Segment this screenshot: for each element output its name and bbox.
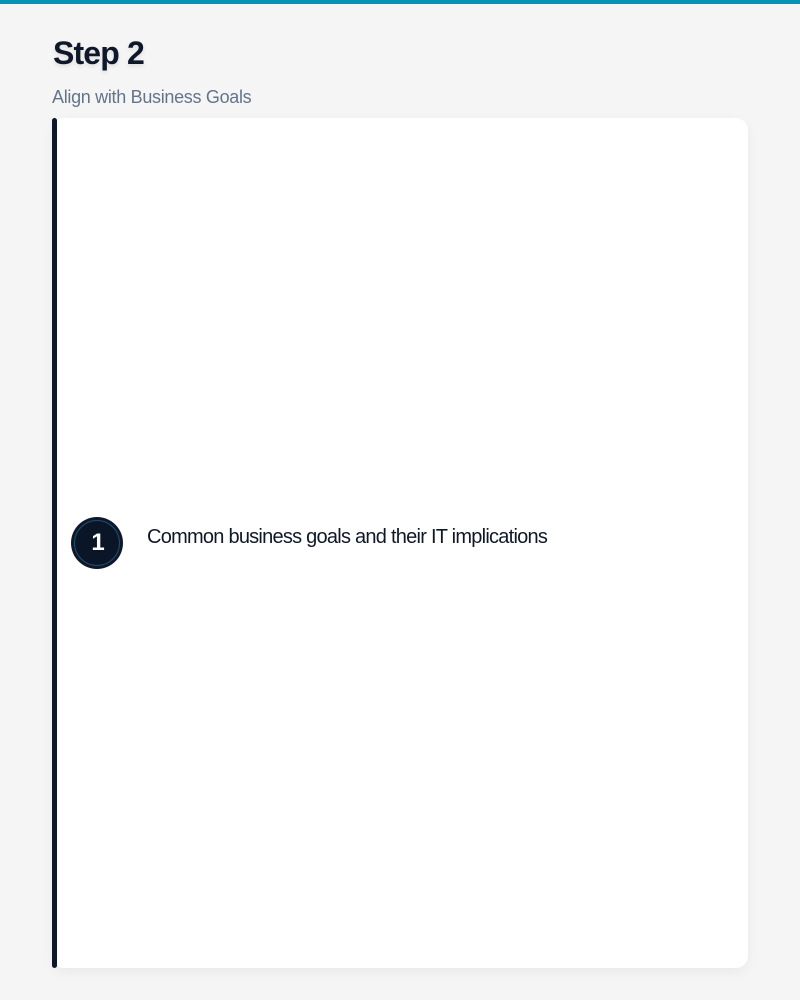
badge inner ring — [74, 520, 120, 566]
subtitle: Align with Business Goals — [52, 87, 251, 107]
number badge — [71, 517, 123, 569]
top accent bar — [0, 0, 800, 4]
title: Step 2 — [53, 35, 144, 71]
panel: content card — [52, 118, 748, 968]
badge number: 1 — [91, 529, 105, 556]
list item text: Common business goals and their IT implications — [147, 526, 547, 548]
card accent bar — [52, 118, 57, 968]
